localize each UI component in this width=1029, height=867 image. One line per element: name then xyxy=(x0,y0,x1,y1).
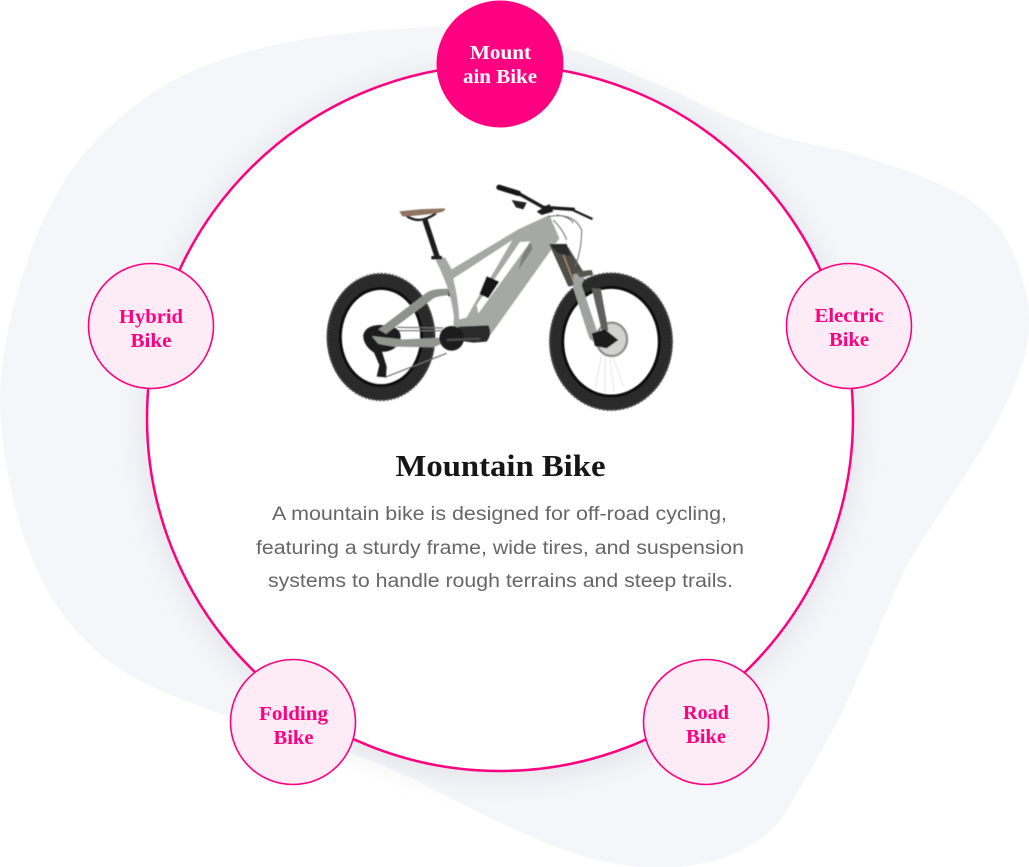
node: Electric Bike xyxy=(786,264,912,388)
description text: systems to handle rough terrains and steep trails. xyxy=(268,571,733,592)
fork crown xyxy=(549,244,571,256)
fork arch xyxy=(575,270,593,277)
seat post xyxy=(425,220,437,257)
node: Road Bike: Bike xyxy=(686,726,726,748)
frame cut-out right xyxy=(477,241,531,313)
description text xyxy=(256,504,744,592)
fork lower leg xyxy=(573,273,597,345)
front wheel xyxy=(550,273,672,410)
chainring and crank xyxy=(439,326,480,351)
node: Hybrid Bike: Bike xyxy=(130,330,172,352)
node: Hybrid Bike: Hybrid xyxy=(119,306,183,328)
node: Folding Bike xyxy=(230,660,356,784)
node: Mountain Bike (active): Mount xyxy=(470,42,531,64)
air shock xyxy=(479,276,499,298)
rear wheel xyxy=(328,274,434,400)
node: Folding Bike: Bike xyxy=(274,727,314,749)
node: Electric Bike: Bike xyxy=(829,329,869,351)
chain xyxy=(385,327,447,377)
handlebar xyxy=(499,187,592,219)
description text: featuring a sturdy frame, wide tires, and suspension xyxy=(256,538,744,559)
brake lever xyxy=(512,200,527,209)
node: Electric Bike: Electric xyxy=(814,305,884,327)
rear fork leg xyxy=(592,288,608,334)
chainstay xyxy=(372,336,443,347)
stem xyxy=(537,204,553,215)
node: Road Bike: Road xyxy=(683,702,729,724)
node: Mountain Bike (active) xyxy=(436,0,564,128)
node: Mountain Bike (active): ain Bike xyxy=(463,66,537,88)
main circle shadow xyxy=(147,69,853,775)
rear shock xyxy=(448,287,464,312)
bike illustration xyxy=(328,187,672,410)
frame graphic xyxy=(518,242,533,270)
motor cover xyxy=(458,325,490,343)
heading: Mountain Bike xyxy=(396,448,606,483)
frame xyxy=(435,215,559,340)
caliper and hub xyxy=(592,329,618,348)
frame cut-out left xyxy=(453,240,512,319)
cassette and derailleur xyxy=(363,325,401,377)
node: Hybrid Bike xyxy=(88,264,214,388)
cables xyxy=(548,215,582,267)
node: Road Bike xyxy=(644,660,768,784)
saddle xyxy=(399,208,445,220)
main circle panel xyxy=(147,65,853,771)
fork stanchions xyxy=(550,246,583,287)
brake disc xyxy=(596,323,627,356)
node: Folding Bike: Folding xyxy=(259,703,328,725)
description text: A mountain bike is designed for off-road cycling, xyxy=(272,504,727,525)
seat stay xyxy=(378,289,457,334)
seat clamp xyxy=(431,256,442,259)
